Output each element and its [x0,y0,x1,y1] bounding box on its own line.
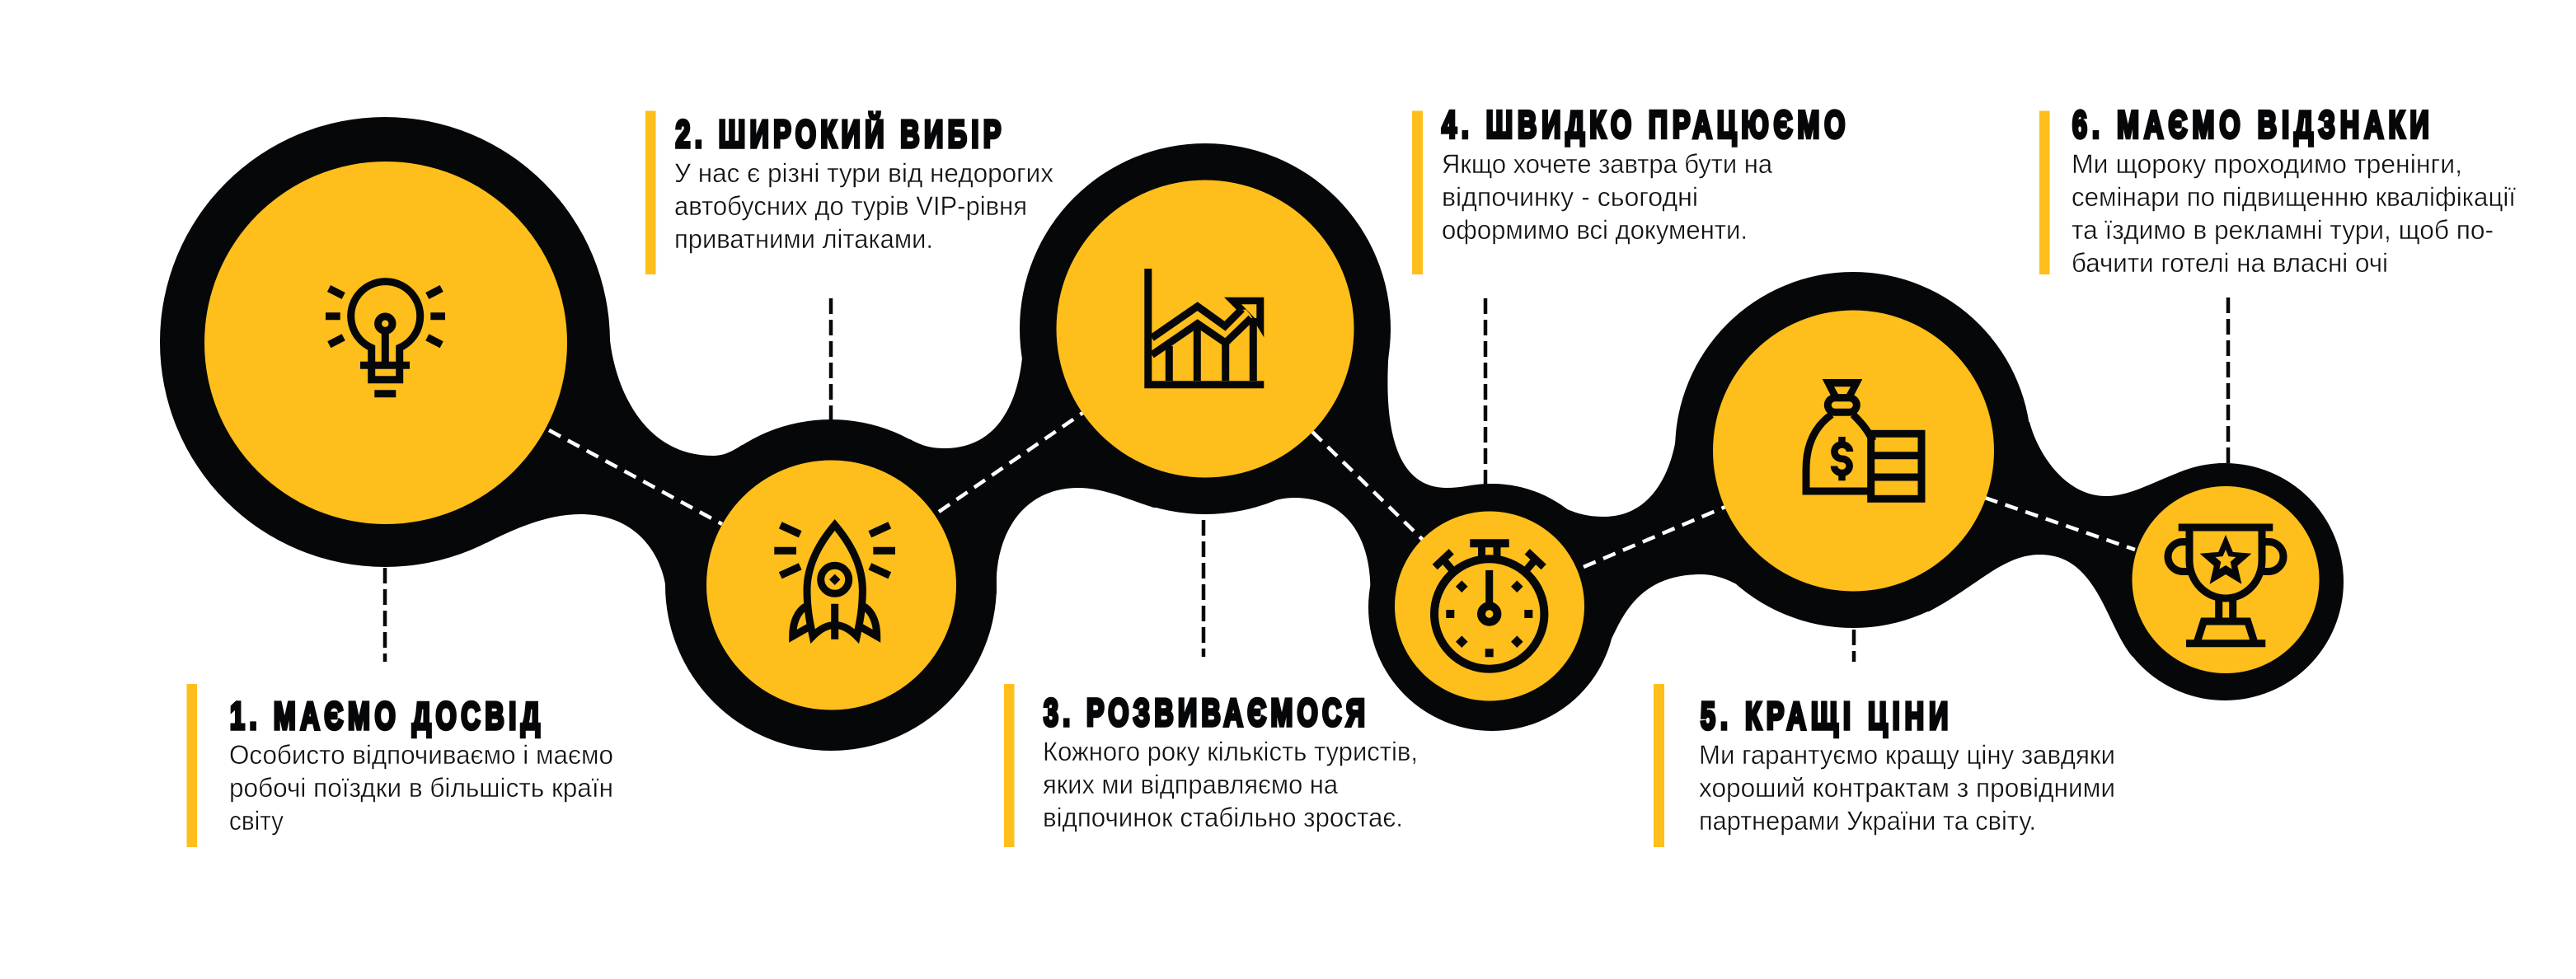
panel: step 1 [186,684,613,847]
panel: step 6: та їздимо в рекламні тури, щоб по- [2072,215,2494,245]
panel: step 4 [1412,104,1845,274]
panel: step 1: світу [229,806,284,836]
panel: step 6 [2039,104,2516,278]
panel: step 1: робочі поїздки в більшість країн [229,773,613,803]
icon: rocket [774,525,895,639]
panel: step 2: 2. ШИРОКИЙ ВИБІР [676,113,1001,156]
panel: step 2 [645,110,1053,274]
icon: trophy [2168,527,2283,644]
panel: step 6: бачити готелі на власні очі [2072,248,2388,278]
icon: money bag and coins [1806,379,1921,499]
panel: step 4: оформимо всі документи. [1442,215,1748,245]
icon: growth chart [1148,269,1264,385]
icon: light bulb [326,282,445,394]
panel: step 6: 6. МАЄМО ВІДЗНАКИ [2072,104,2429,146]
panel: step 5: хороший контрактам з провідними [1699,773,2115,803]
yellow circles [204,162,2320,710]
panel: step 1: 1. МАЄМО ДОСВІД [230,696,540,738]
panel: step 5: Ми гарантуємо кращу ціну завдяки [1699,740,2115,770]
panel: step 3: яких ми відправляємо на [1043,770,1338,799]
panel: step 2: приватними літаками. [674,224,933,254]
panel: step 3: 3. РОЗВИВАЄМОСЯ [1044,692,1365,734]
panel: step 2: У нас є різні тури від недорогих [674,158,1053,188]
panel: step 4: Якщо хочете завтра бути на [1442,149,1772,179]
panel: step 3 [1004,684,1418,847]
panel: step 4: відпочинку - сьогодні [1442,182,1698,212]
black dashed connectors [385,297,2228,662]
panel: step 6: Ми щороку проходимо тренінги, [2072,149,2462,179]
winding black track [160,117,2344,751]
panel: step 5: 5. КРАЩІ ЦІНИ [1701,696,1948,738]
panel: step 2: автобусних до турів VIP-рівня [674,191,1027,221]
panel: step 5 [1654,684,2115,847]
panel: step 3: відпочинок стабільно зростає. [1043,803,1403,832]
panel: step 3: Кожного року кількість туристів, [1043,737,1418,766]
panel: step 6: семінари по підвищенню кваліфікації [2072,182,2516,212]
panel: step 4: 4. ШВИДКО ПРАЦЮЄМО [1442,104,1845,146]
icon: stopwatch [1434,543,1544,669]
white dashed links between circles [549,412,2135,567]
panel: step 1: Особисто відпочиваємо і маємо [229,740,613,770]
panel: step 5: партнерами України та світу. [1699,806,2036,836]
